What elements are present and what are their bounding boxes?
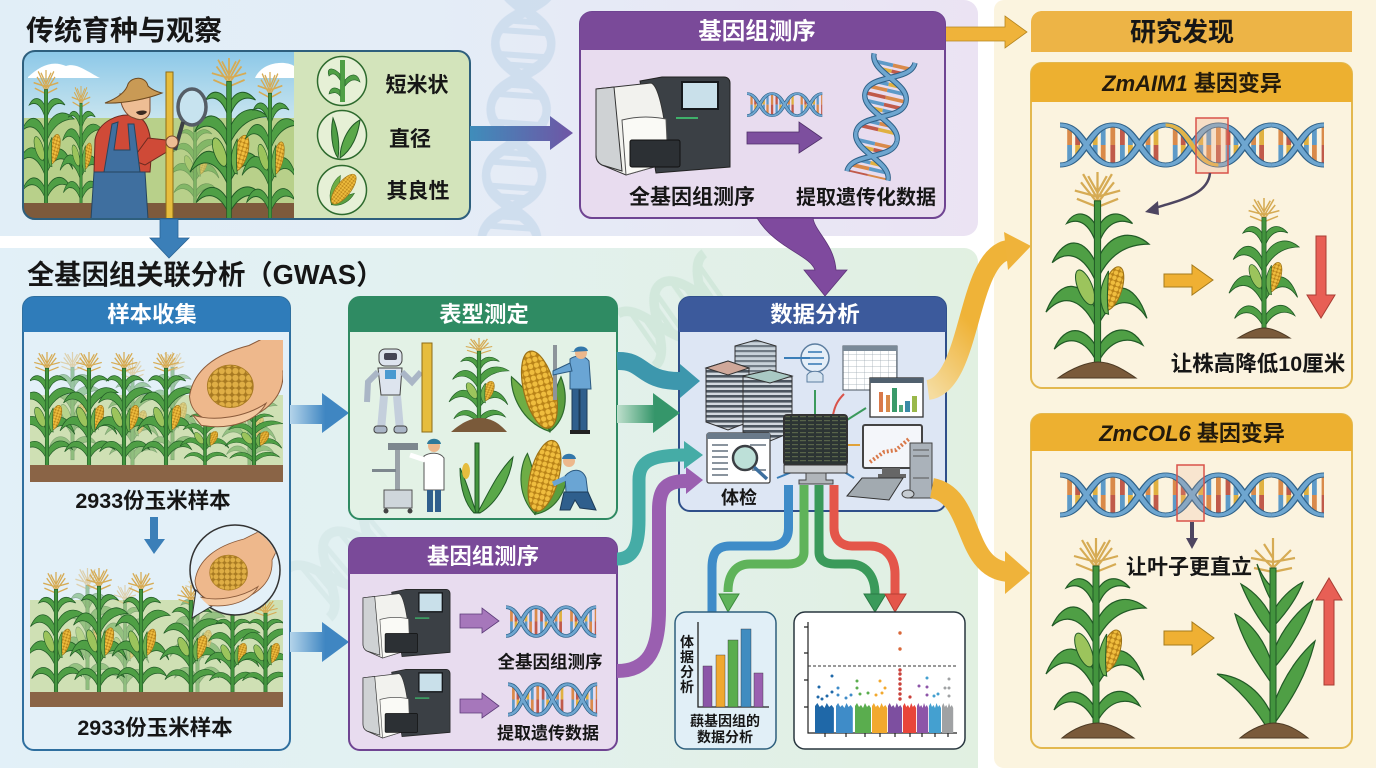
panel header — [679, 297, 946, 332]
arrow: sequencing to findings — [945, 16, 1027, 48]
vertical label: 分 — [680, 664, 694, 680]
arrow: samples to phenotyping — [290, 393, 349, 433]
header label: ZmAIM1 基因变异 — [1101, 71, 1282, 96]
arrow: purple sequencing flow — [617, 467, 703, 671]
arrow: sequencing to data analysis — [757, 218, 847, 296]
arrow: red down — [1307, 236, 1335, 318]
icon: DNA 1 — [506, 605, 596, 638]
panel header — [580, 12, 945, 50]
icon: leaf — [318, 110, 366, 160]
arrow: red up — [1316, 578, 1342, 685]
arrow: purple 2 — [460, 693, 499, 718]
panel header — [349, 297, 617, 332]
background band: findings section — [994, 0, 1376, 768]
header label: 基因组测序 — [427, 544, 539, 569]
arrow: observation to GWAS — [150, 219, 189, 258]
icon: spreadsheet — [843, 346, 897, 390]
icon: stalk — [318, 56, 366, 106]
icon: corn ear with worker — [505, 345, 591, 438]
result label: 让叶子更直立 — [1126, 555, 1252, 579]
icon: cloud globe — [801, 344, 829, 382]
illustration: farmer measuring corn — [18, 51, 298, 223]
illustration: original plant — [1046, 538, 1146, 738]
icon: server stacks — [706, 340, 792, 441]
header label: 样本收集 — [107, 302, 197, 327]
result label: 让株高降低10厘米 — [1171, 351, 1346, 376]
header label: 数据分析 — [770, 302, 860, 327]
callout: seeds in hands — [190, 525, 282, 618]
icon: DNA 2 — [508, 682, 598, 717]
vertical label: 体 — [680, 634, 694, 650]
header: research findings — [1031, 11, 1352, 52]
arrow: teal phenotype flow — [617, 361, 700, 398]
label: whole genome sequencing: 全基因组测序 — [498, 652, 602, 672]
heading label: 研究发现 — [1130, 17, 1234, 47]
arrow: purple 1 — [460, 608, 499, 633]
DNA helix — [1060, 125, 1376, 165]
header label: 基因组测序 — [698, 18, 816, 44]
arrow: gene to label — [1186, 522, 1198, 549]
background band: GWAS section — [0, 248, 978, 768]
icon: scatter plot monitor with tower — [847, 425, 932, 500]
arrow: teal sequencing flow — [617, 441, 703, 559]
panel: Manhattan plot — [794, 612, 965, 749]
panel: genome sequencing (top) — [580, 12, 945, 220]
trait label: 直径 — [389, 128, 431, 151]
branching arrows from data analysis — [712, 485, 906, 612]
watermark: DNA helices — [288, 0, 741, 618]
illustration: corn field 1 — [30, 340, 283, 482]
heading: GWAS: 全基因组关联分析（GWAS） — [27, 259, 383, 290]
DNA helix — [1060, 475, 1376, 515]
icon: corn ear with kneeling worker — [512, 435, 596, 520]
arrow: blue branch — [712, 485, 788, 612]
icon: robot with ruler — [367, 343, 432, 433]
highlight box — [1177, 465, 1204, 521]
gold arrow: analysis to ZmCOL6 — [932, 488, 1030, 594]
highlight box — [1196, 118, 1228, 173]
chromosome columns — [815, 703, 953, 733]
trait label: 其良性 — [386, 179, 450, 203]
header label: 表型测定 — [439, 302, 529, 327]
arrow: down — [144, 517, 165, 554]
bars — [703, 629, 763, 707]
arrow: observation to sequencing — [470, 116, 573, 150]
panel: bar chart — [675, 612, 776, 749]
sequencing label: 全基因组测序 — [629, 185, 755, 209]
arrow: orange — [1164, 622, 1214, 655]
icon: bar chart window — [870, 378, 923, 417]
icon: document with magnifier — [707, 433, 770, 483]
panel: ZmAIM1 — [1031, 63, 1376, 388]
arrow: green phenotype flow — [617, 393, 680, 433]
illustration: short plant — [1229, 198, 1299, 338]
icon: central monitor — [784, 415, 847, 484]
significance threshold — [808, 665, 957, 667]
panel header — [349, 538, 617, 574]
extraction label: 提取遗传化数据 — [796, 186, 936, 209]
illustration: corn field 2 — [27, 568, 293, 707]
gold arrow: analysis to ZmAIM1 — [928, 232, 1031, 390]
heading: traditional breeding: 传统育种与观察 — [26, 15, 222, 46]
vertical label: 据 — [680, 649, 694, 665]
chart caption: 蕻基因组的 — [690, 713, 760, 729]
panel header — [23, 297, 290, 332]
scatter points — [816, 631, 950, 701]
arrow: red branch — [834, 485, 906, 612]
label: genetic data extraction: 提取遗传数据 — [497, 724, 599, 743]
panel: field observation — [18, 51, 470, 223]
panel: data analysis — [679, 297, 946, 511]
arrow: samples to sequencing — [290, 622, 349, 662]
arrow: orange — [1164, 265, 1213, 295]
label: checkup: 体检 — [721, 487, 757, 508]
icon: small DNA — [747, 92, 822, 117]
icon: sequencer 2 — [363, 669, 450, 738]
panel: phenotyping — [349, 297, 617, 520]
illustration: upright plant — [1217, 538, 1315, 738]
background band: top section — [0, 0, 978, 236]
icon: sequencer — [596, 77, 730, 175]
plot axes — [804, 622, 957, 737]
panel: genome sequencing (GWAS) — [349, 538, 627, 750]
header label: ZmCOL6 基因变异 — [1098, 421, 1285, 446]
curved arrows into data analysis — [617, 361, 703, 671]
trait label: 短米状 — [386, 74, 448, 97]
icon: corn ear — [318, 166, 366, 214]
icon: corn plant on soil — [449, 338, 509, 432]
icon: sequencer 1 — [363, 589, 450, 658]
illustration: tall plant — [1046, 172, 1149, 378]
panel: sample collection — [18, 297, 296, 750]
icon: scientist with instrument — [372, 439, 444, 514]
icon: large DNA — [844, 52, 918, 182]
small flow arrows — [777, 358, 866, 478]
arrow: gene to plant — [1145, 173, 1210, 215]
arrow: dark green branch — [819, 485, 886, 612]
arrow: light green branch — [719, 485, 804, 612]
panel header — [1031, 63, 1352, 102]
sample count label: 2933份玉米样本 — [75, 489, 231, 513]
arrow: purple — [747, 122, 822, 153]
panel header — [1031, 414, 1352, 451]
sample count label: 2933份玉米样本 — [77, 716, 233, 740]
chart caption: 数据分析 — [697, 729, 753, 745]
chart axes — [698, 622, 769, 707]
vertical label: 析 — [680, 679, 694, 695]
panel: ZmCOL6 — [1031, 414, 1376, 748]
icon: leaf sprout — [460, 443, 513, 513]
